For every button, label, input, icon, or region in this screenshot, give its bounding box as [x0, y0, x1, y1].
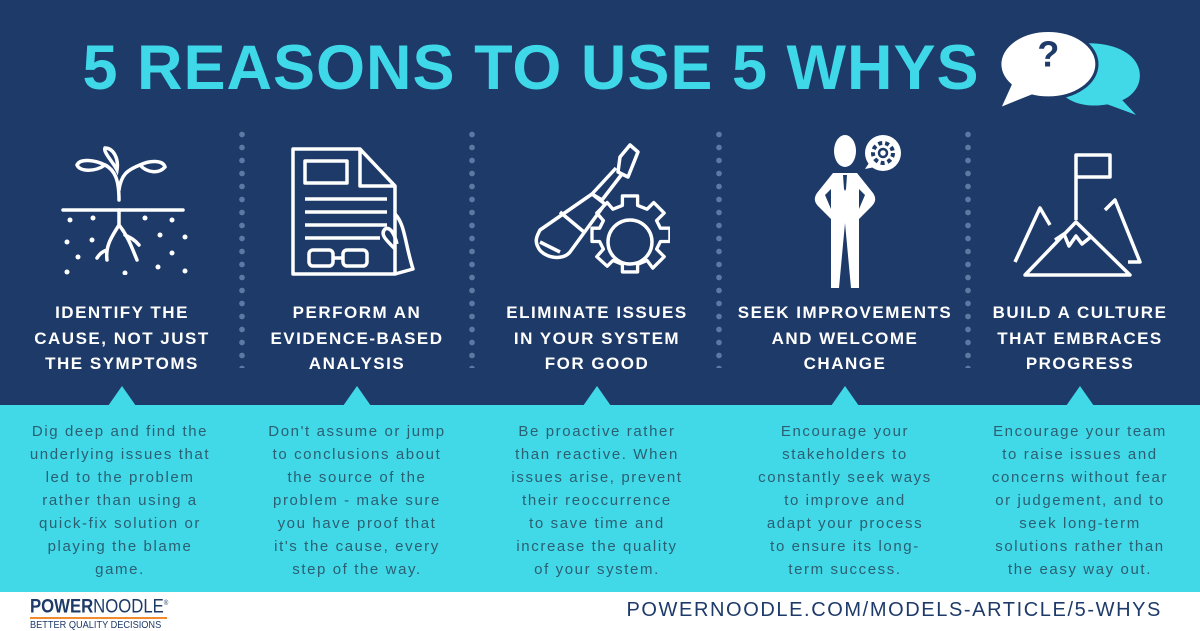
body texts: playing the blame [48, 538, 192, 555]
text: term success. [788, 561, 902, 578]
body texts: Dig deep and find the [32, 423, 208, 440]
text: or judgement, and to [995, 492, 1165, 509]
text: seek long-term [1019, 515, 1141, 532]
body texts: rather than using a [42, 492, 198, 509]
body texts [30, 423, 210, 578]
text: to conclusions about [273, 446, 441, 463]
icon: businessman with gear [814, 135, 901, 288]
text: step of the way. [292, 561, 422, 578]
text: the source of the [288, 469, 426, 486]
text: to raise issues and [1002, 446, 1158, 463]
body texts: underlying issues that [30, 446, 210, 463]
title: 5 REASONS TO USE 5 WHYS [82, 33, 980, 103]
text: ELIMINATE ISSUES [506, 303, 688, 322]
text: BUILD A CULTURE [993, 303, 1167, 322]
text: EVIDENCE-BASED [270, 328, 444, 348]
footer [0, 592, 1200, 628]
headings: THE SYMPTOMS [45, 354, 199, 373]
text: AND WELCOME [772, 328, 918, 348]
headings [34, 303, 210, 373]
text: IN YOUR SYSTEM [514, 328, 680, 348]
text: SEEK IMPROVEMENTS [738, 303, 952, 322]
headings: CAUSE, NOT JUST [34, 328, 210, 348]
logo: BETTER QUALITY DECISIONS [30, 620, 161, 631]
icon: mountain with flag [1014, 153, 1142, 277]
text: the easy way out. [1008, 561, 1152, 578]
text: CHANGE [804, 354, 886, 373]
body texts: quick-fix solution or [39, 515, 201, 532]
text: adapt your process [767, 515, 923, 532]
text: ANALYSIS [309, 354, 405, 373]
text: stakeholders to [782, 446, 908, 463]
text: PERFORM AN [293, 303, 421, 322]
text: to improve and [784, 492, 906, 509]
icon: speech bubbles: ? [1037, 34, 1059, 74]
text: concerns without fear [992, 469, 1168, 486]
text: of your system. [534, 561, 660, 578]
text: you have proof that [278, 515, 436, 532]
text: solutions rather than [995, 538, 1165, 555]
text: FOR GOOD [545, 354, 649, 373]
text: PROGRESS [1026, 354, 1134, 373]
text: issues arise, prevent [511, 469, 683, 486]
text: their reoccurrence [522, 492, 672, 509]
url: POWERNOODLE.COM/MODELS-ARTICLE/5-WHYS [626, 599, 1162, 621]
logo [30, 596, 168, 631]
text: Don't assume or jump [268, 423, 446, 440]
logo: POWERNOODLE® [30, 596, 168, 617]
text: Encourage your [781, 423, 909, 440]
body texts: game. [95, 561, 145, 578]
text: Be proactive rather [518, 423, 676, 440]
text: than reactive. When [515, 446, 679, 463]
icon: screwdriver and gear [534, 143, 670, 274]
icon: plant roots [61, 146, 188, 275]
icon: speech bubbles [1001, 32, 1140, 115]
text: problem - make sure [273, 492, 441, 509]
text: it's the cause, every [274, 538, 440, 555]
icon: document held [291, 147, 415, 276]
text: to save time and [529, 515, 665, 532]
dividers [239, 128, 245, 368]
body texts: led to the problem [46, 469, 194, 486]
headings: IDENTIFY THE [55, 303, 189, 322]
text: to ensure its long- [770, 538, 920, 555]
pointers [108, 386, 136, 406]
cyan band [0, 405, 1200, 592]
text: THAT EMBRACES [997, 328, 1163, 348]
text: increase the quality [516, 538, 678, 555]
text: constantly seek ways [758, 469, 932, 486]
text: Encourage your team [993, 423, 1167, 440]
